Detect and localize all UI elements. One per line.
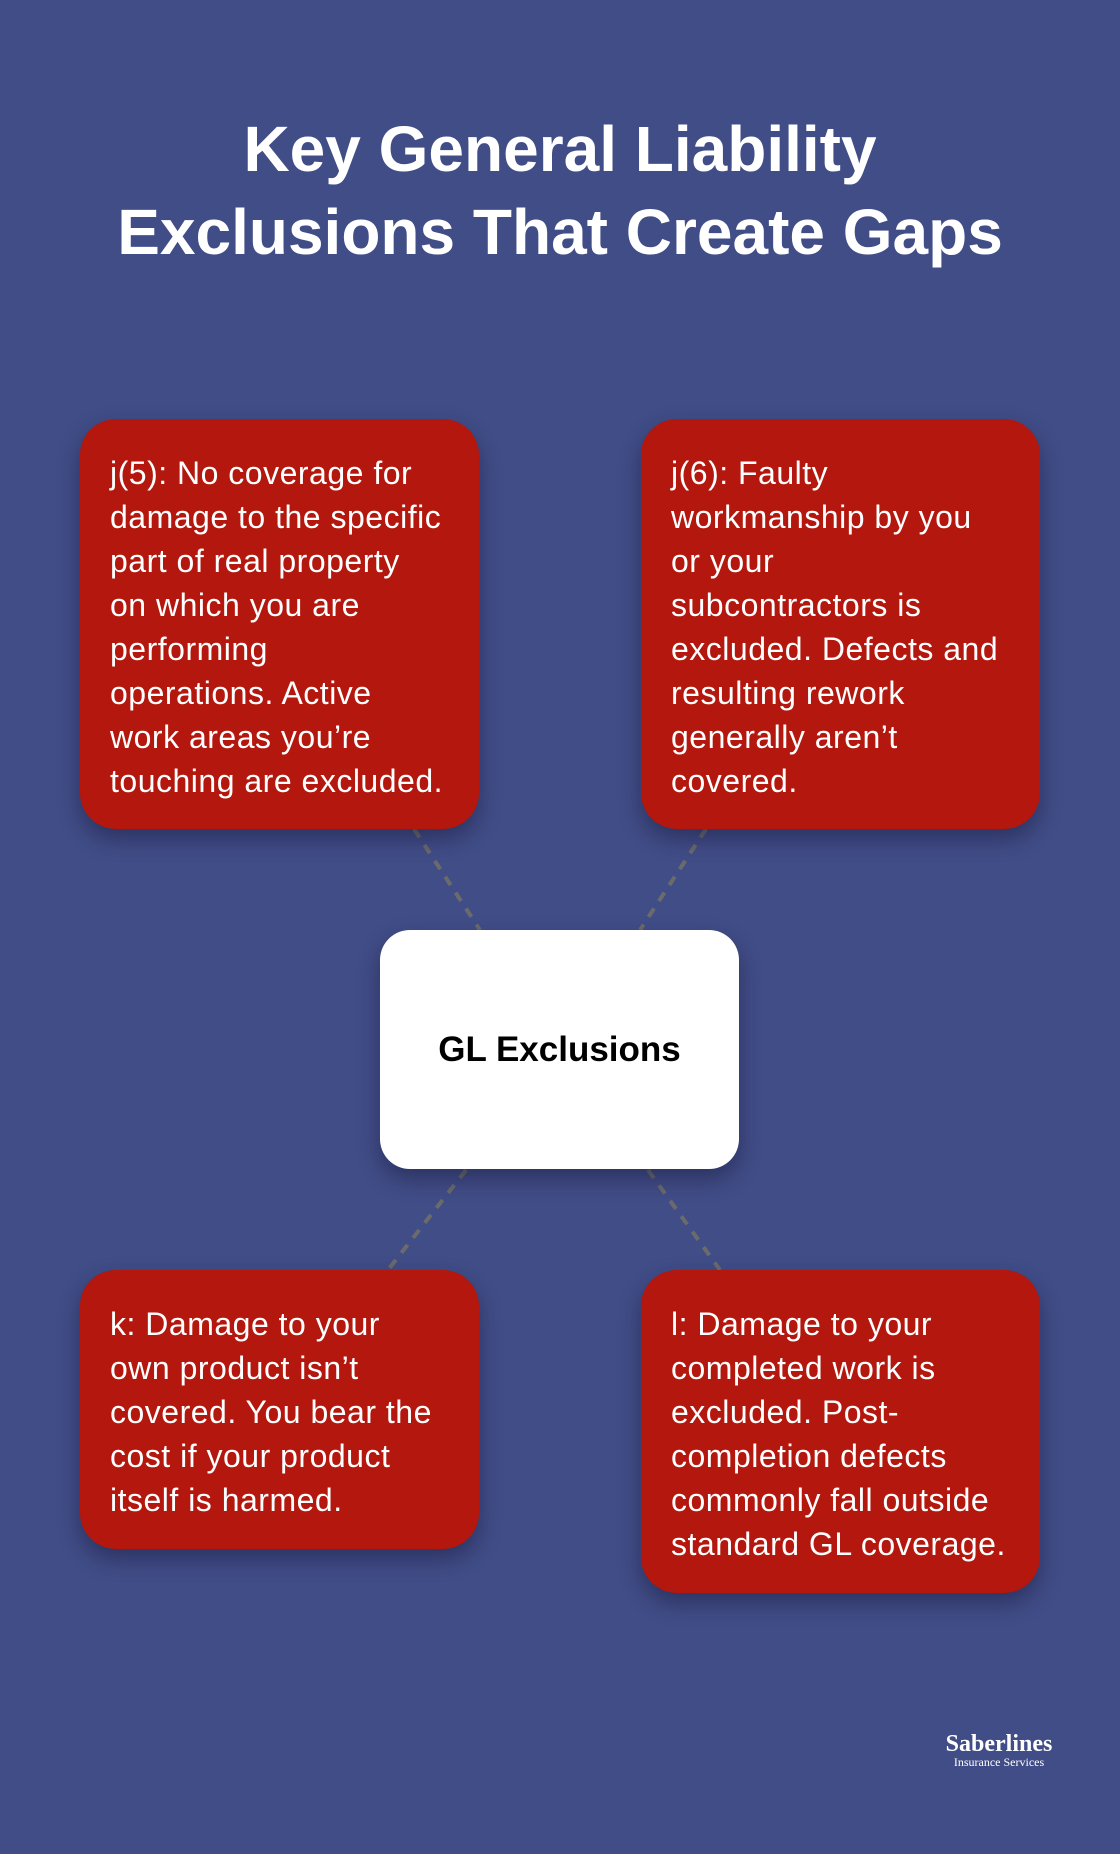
panel: j(5): on which you are xyxy=(110,587,360,623)
title: Exclusions That Create Gaps xyxy=(117,196,1003,268)
panel: l: standard GL coverage. xyxy=(671,1526,1006,1562)
panel: j(6): j(6): Faulty xyxy=(671,455,828,491)
logo xyxy=(946,1731,1052,1769)
panel: l xyxy=(641,1270,1040,1593)
logo: Saberlines xyxy=(946,1731,1052,1757)
panel: j(6): excluded. Defects and xyxy=(671,631,998,667)
panel: k: itself is harmed. xyxy=(110,1482,343,1518)
panel: l: completed work is xyxy=(671,1350,936,1386)
title: Key General Liability xyxy=(243,113,877,185)
panel: k xyxy=(80,1270,479,1549)
panel: j(5): performing xyxy=(110,631,268,667)
panel: j(6) xyxy=(641,419,1040,829)
center node xyxy=(380,930,739,1169)
panel: j(6): resulting rework xyxy=(671,675,905,711)
panel: j(5) xyxy=(80,419,479,829)
panel: j(5): part of real property xyxy=(110,543,400,579)
panel: j(6): workmanship by you xyxy=(671,499,972,535)
panel: j(5): touching are excluded. xyxy=(110,763,443,799)
title xyxy=(117,113,1003,268)
panel: k: cost if your product xyxy=(110,1438,390,1474)
panel: l: completion defects xyxy=(671,1438,947,1474)
panel: l: l: Damage to your xyxy=(671,1306,932,1342)
panel: k: covered. You bear the xyxy=(110,1394,432,1430)
panel: j(6): generally aren’t xyxy=(671,719,898,755)
center node: GL Exclusions xyxy=(438,1030,681,1068)
panel: j(5): work areas you’re xyxy=(110,719,371,755)
panel: j(6): covered. xyxy=(671,763,798,799)
panel: k: k: Damage to your xyxy=(110,1306,380,1342)
panel: l: excluded. Post- xyxy=(671,1394,899,1430)
panel: l: commonly fall outside xyxy=(671,1482,989,1518)
panel: j(6): subcontractors is xyxy=(671,587,921,623)
panel: j(6): or your xyxy=(671,543,774,579)
panel: j(5): damage to the specific xyxy=(110,499,441,535)
logo: Insurance Services xyxy=(954,1755,1044,1769)
panel: k: own product isn’t xyxy=(110,1350,359,1386)
panel: j(5): j(5): No coverage for xyxy=(110,455,412,491)
panel: j(5): operations. Active xyxy=(110,675,372,711)
